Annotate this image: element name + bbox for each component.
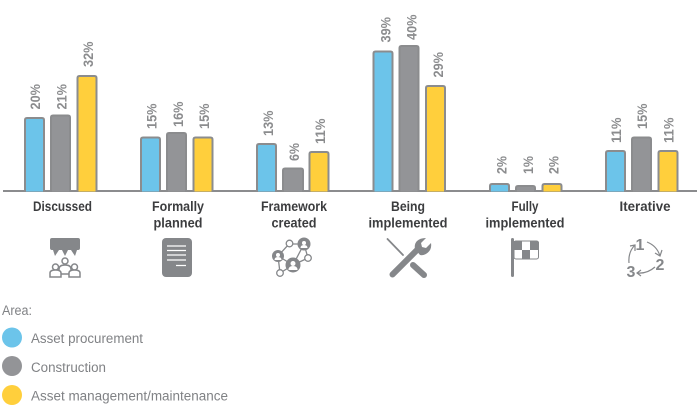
icon: iterative cycle 1 2 3 [627,237,665,281]
value: 11%: 11% [609,118,624,143]
category label: Framework created: Framework [261,199,327,214]
legend item: Asset procurement [2,328,143,348]
bar: being maintenance [426,86,445,192]
bar: framework procurement [257,144,276,192]
value: 40%: 40% [404,14,420,40]
bar: framework construction [283,168,303,192]
category label: Fully implemented: Fully [512,199,539,214]
bar: planned construction [167,133,186,192]
value: 39%: 39% [378,17,394,42]
category label: Discussed: Discussed [33,199,92,214]
category label: Being implemented: Being [391,199,425,214]
category label: Fully implemented: implemented [486,216,564,230]
value: 2%: 2% [546,156,562,174]
group: Fully implemented [490,156,562,192]
value: 15%: 15% [144,104,160,129]
legend title: Area: [2,303,32,318]
category label: Formally planned: Formally [152,199,204,214]
icon: wrench and screwdriver [388,238,431,275]
icon: discussion group [50,238,80,277]
value: 29%: 29% [431,52,446,78]
icon: checkered flag [511,238,539,277]
icon: iterative cycle 1 2 3: 2 [656,257,665,274]
category label: Fully implemented [486,199,564,230]
icon: document [162,238,192,277]
group: Being implemented [374,14,446,192]
icon: iterative cycle 1 2 3: 3 [627,264,636,281]
bar: fully construction [516,186,535,192]
bar: framework maintenance [310,152,328,192]
bar: iterative procurement [606,151,625,192]
bar: Discussed construction [51,116,70,192]
legend item: Asset procurement: Asset procurement [31,331,143,346]
category label: Being implemented: implemented [368,216,448,230]
value: 1%: 1% [521,156,536,174]
group: Iterative [606,104,678,192]
bar: planned maintenance [194,138,212,192]
icon: iterative cycle 1 2 3: 1 [636,237,645,254]
legend item: Asset management/maintenance [2,385,228,405]
bar: iterative construction [632,138,651,192]
bar: fully maintenance [542,184,562,192]
group: Framework created [257,110,328,192]
value: 21%: 21% [54,84,70,110]
bar: being procurement [374,52,392,192]
legend item: Asset management/maintenance: Asset management/maintenance [31,388,228,404]
bar: planned procurement [141,138,160,192]
value: 13%: 13% [261,110,276,136]
value: 11%: 11% [662,118,676,143]
legend item: Construction [2,356,106,376]
chart baseline [3,190,697,192]
icon: network of people [272,238,311,276]
category label: Framework created [261,199,327,230]
value: 6%: 6% [287,143,302,161]
value: 2%: 2% [494,156,510,174]
bar: Discussed procurement [25,118,44,192]
group: Discussed [25,42,96,192]
bar: iterative maintenance [658,151,678,192]
bar: Discussed maintenance [78,76,96,192]
bar: fully procurement [490,184,509,192]
category label: Iterative: Iterative [620,199,671,214]
value: 15%: 15% [635,104,650,129]
value: 20%: 20% [28,84,43,110]
category label: Being implemented [368,199,448,230]
legend item: Construction: Construction [31,360,106,375]
legend [2,303,228,405]
value: 15%: 15% [197,104,212,129]
value: 32%: 32% [81,42,96,67]
bar: being construction [400,46,418,192]
category label: Formally planned: planned [154,216,202,230]
group: Formally planned [141,102,212,192]
value: 11%: 11% [313,118,328,144]
category label: Formally planned [152,199,204,230]
value: 16%: 16% [171,102,186,127]
category label: Framework created: created [272,216,316,230]
